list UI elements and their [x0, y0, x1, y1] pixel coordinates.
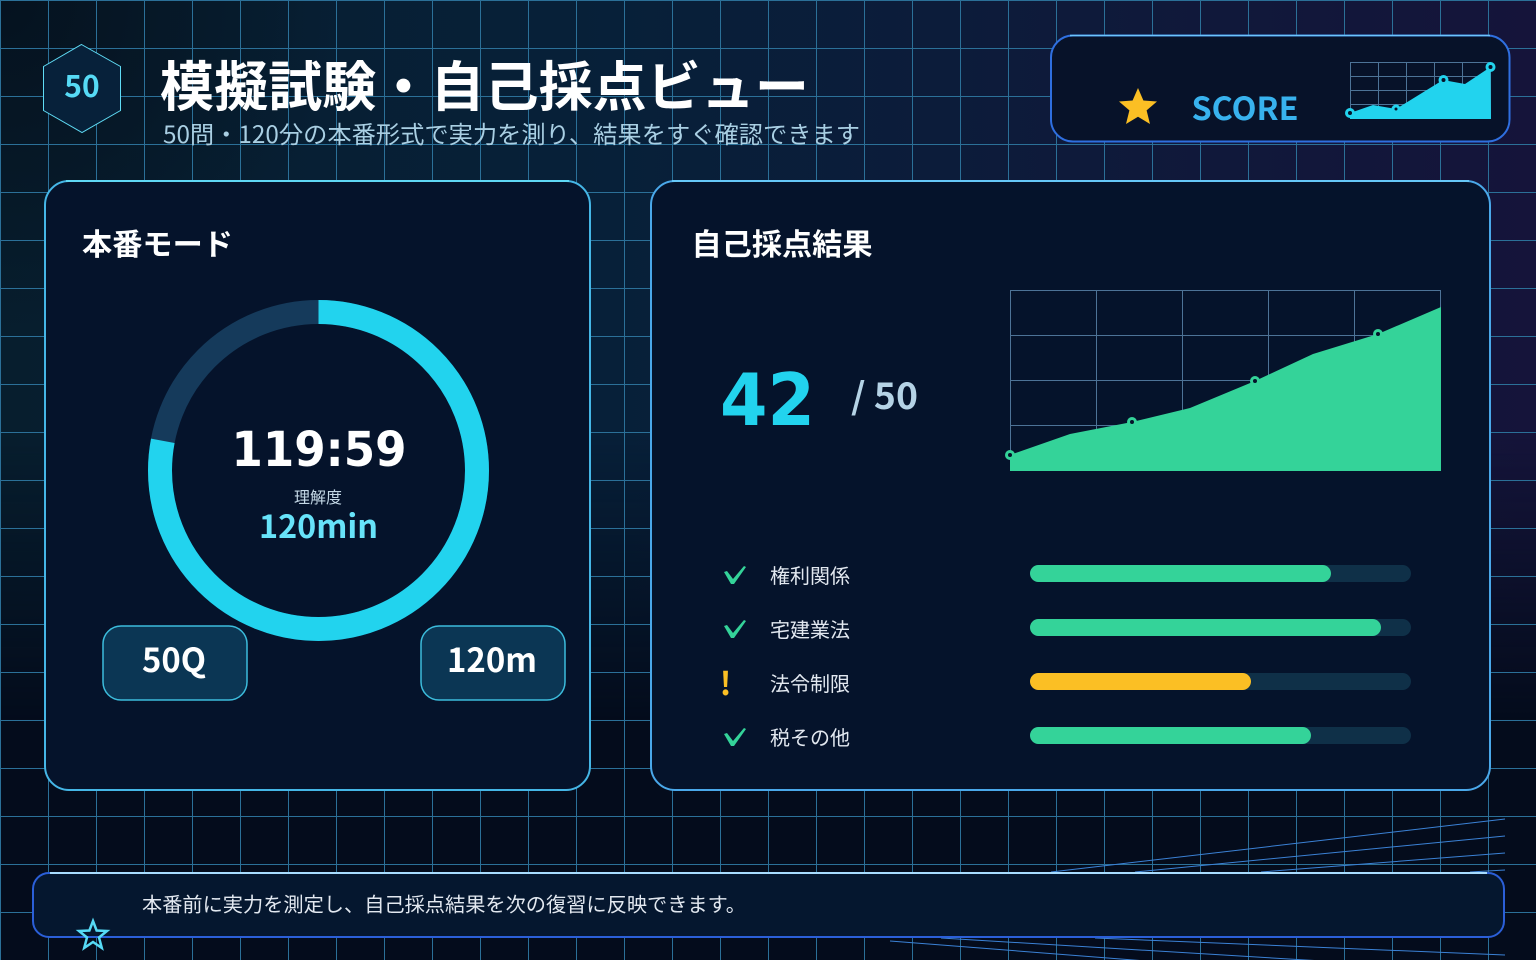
panel: score badge — [1051, 36, 1510, 142]
icon: hexagon badge 50 — [44, 44, 120, 132]
icon: star — [1119, 88, 1157, 124]
icon: hexagon badge 50: 50 — [64, 62, 100, 106]
heading: exam mode: 本番モード — [82, 220, 233, 264]
panel: self-scoring results — [651, 181, 1490, 790]
panel: exam mode — [45, 181, 590, 790]
pill: minutes — [421, 626, 565, 700]
heading: results: 自己採点結果 — [692, 220, 872, 264]
score total: / 50 — [851, 368, 918, 420]
area chart — [1006, 290, 1441, 471]
score label: SCORE — [1192, 84, 1298, 130]
title: 模擬試験・自己採点ビュー — [160, 43, 809, 122]
row: zoning law — [720, 659, 1411, 705]
countdown time: 119:59 — [232, 422, 406, 478]
row: zoning law: 法令制限 — [770, 668, 850, 697]
callout: footer banner — [33, 873, 1504, 937]
duration: 120min — [259, 502, 378, 548]
row: tax and others: 税その他 — [770, 722, 850, 751]
score value: 42 — [720, 358, 815, 442]
row: real estate law: 宅建業法 — [770, 614, 850, 643]
row: real estate law — [724, 614, 1411, 643]
ring gauge — [160, 312, 477, 629]
row: rights: 権利関係 — [770, 560, 850, 589]
row: tax and others — [724, 722, 1411, 751]
mini area chart — [1346, 62, 1494, 119]
pill: minutes: 120m — [447, 634, 537, 682]
pill: questions — [103, 626, 247, 700]
row: rights — [724, 560, 1411, 589]
icon: outline star — [79, 921, 107, 948]
subtitle: 50問・120分の本番形式で実力を測り、結果をすぐ確認できます — [163, 115, 860, 150]
row: zoning law: ! — [720, 659, 731, 705]
callout: footer banner: 本番前に実力を測定し、自己採点結果を次の復習に反映できます。 — [142, 888, 746, 918]
gauge label: 理解度 — [294, 484, 342, 508]
pill: questions: 50Q — [142, 634, 206, 682]
